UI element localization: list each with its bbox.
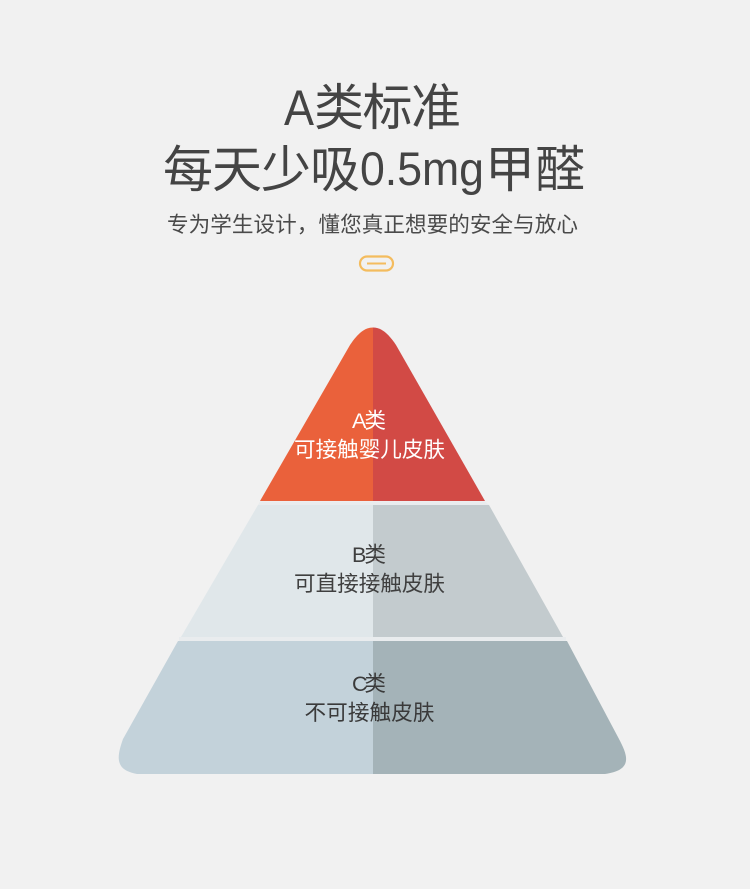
- tier C: [110, 640, 633, 780]
- tier B: [181, 505, 563, 637]
- tier B label: 可直接接触皮肤: [294, 571, 445, 596]
- tier A label: A类: [352, 408, 386, 433]
- title: [163, 80, 585, 198]
- tier gap band: [179, 637, 566, 641]
- title line 1: A: [284, 80, 315, 136]
- tier A label: 可接触婴儿皮肤: [294, 437, 445, 462]
- tier C label: [304, 671, 434, 725]
- title line 1: 类标准: [314, 80, 461, 136]
- subtitle: 专为学生设计，懂您真正想要的安全与放心: [167, 212, 578, 237]
- tier C label: C类: [352, 671, 386, 696]
- tier gap band: [258, 502, 489, 505]
- title line 2: 每天少吸: [163, 142, 360, 198]
- tier B label: B类: [352, 542, 386, 567]
- tier B label: [294, 542, 445, 596]
- icon: orange pill divider: [360, 256, 393, 270]
- title line 2: 0.5mg: [360, 142, 484, 195]
- pyramid chart: [110, 320, 633, 780]
- tier C label: 不可接触皮肤: [304, 700, 434, 725]
- tier A label: [294, 408, 445, 462]
- tier A: [260, 328, 485, 501]
- title line 2: [163, 142, 585, 198]
- title line 2: 甲醛: [485, 142, 585, 198]
